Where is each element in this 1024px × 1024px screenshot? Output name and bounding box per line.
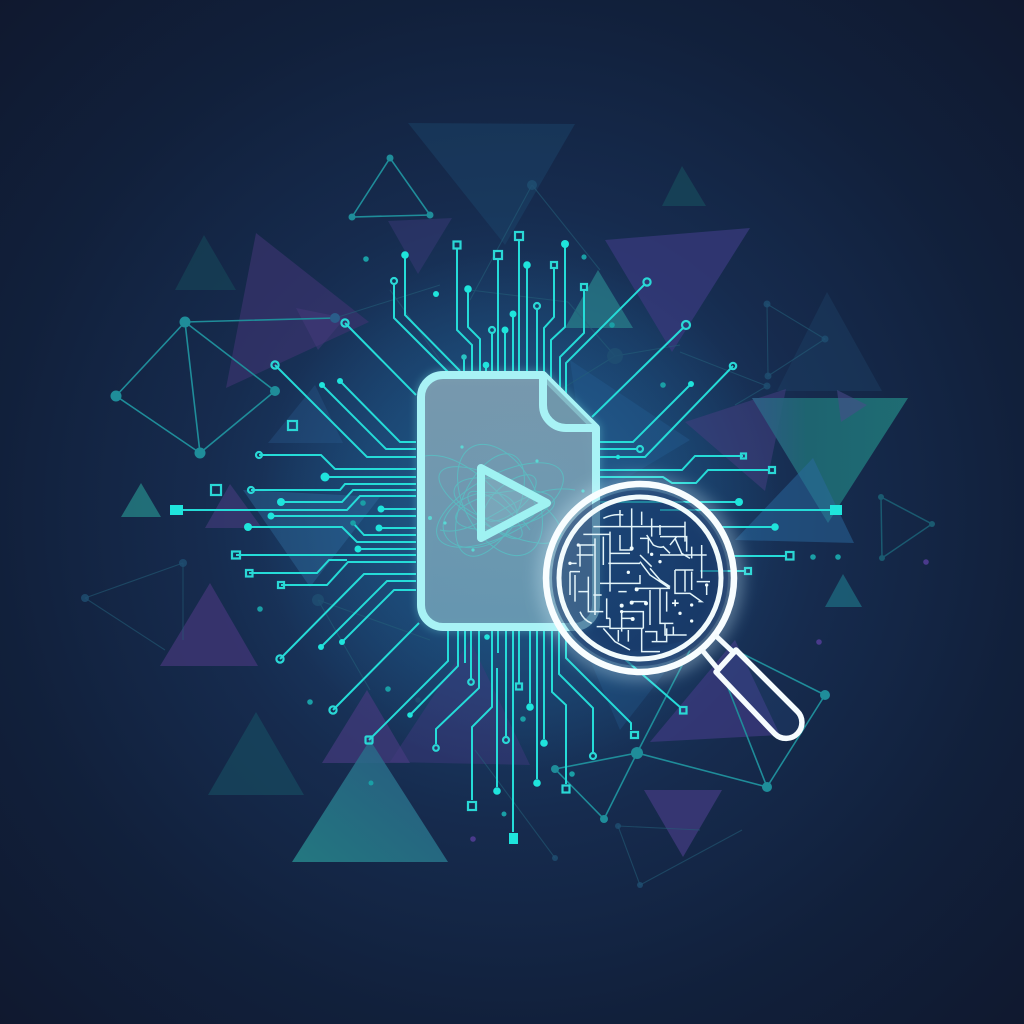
background triangles: [121, 123, 908, 862]
lens inner ring: [559, 497, 721, 659]
circuit traces: top side: [391, 232, 690, 417]
circuit pattern inside lens: [568, 508, 710, 652]
network: top triangle: [348, 154, 434, 220]
central blue glow: [260, 250, 780, 770]
circuit traces: right side: [470, 322, 929, 842]
magnifier glow: [546, 484, 734, 672]
file glow: [421, 375, 596, 627]
handle neck: [702, 635, 733, 668]
network: left cluster: [110, 313, 340, 458]
play triangle: [481, 468, 547, 538]
circuit traces: bottom side: [366, 630, 686, 844]
lens outer ring: [546, 484, 734, 672]
network: lower right cluster: [551, 645, 830, 823]
video file icon: [421, 375, 596, 627]
magnifying glass: [546, 484, 802, 738]
network: right triangle: [878, 494, 935, 561]
faint network lines: [81, 180, 828, 888]
handle: [716, 650, 802, 738]
circuit traces: left side: [170, 256, 421, 714]
orbit scribble: [424, 430, 576, 570]
